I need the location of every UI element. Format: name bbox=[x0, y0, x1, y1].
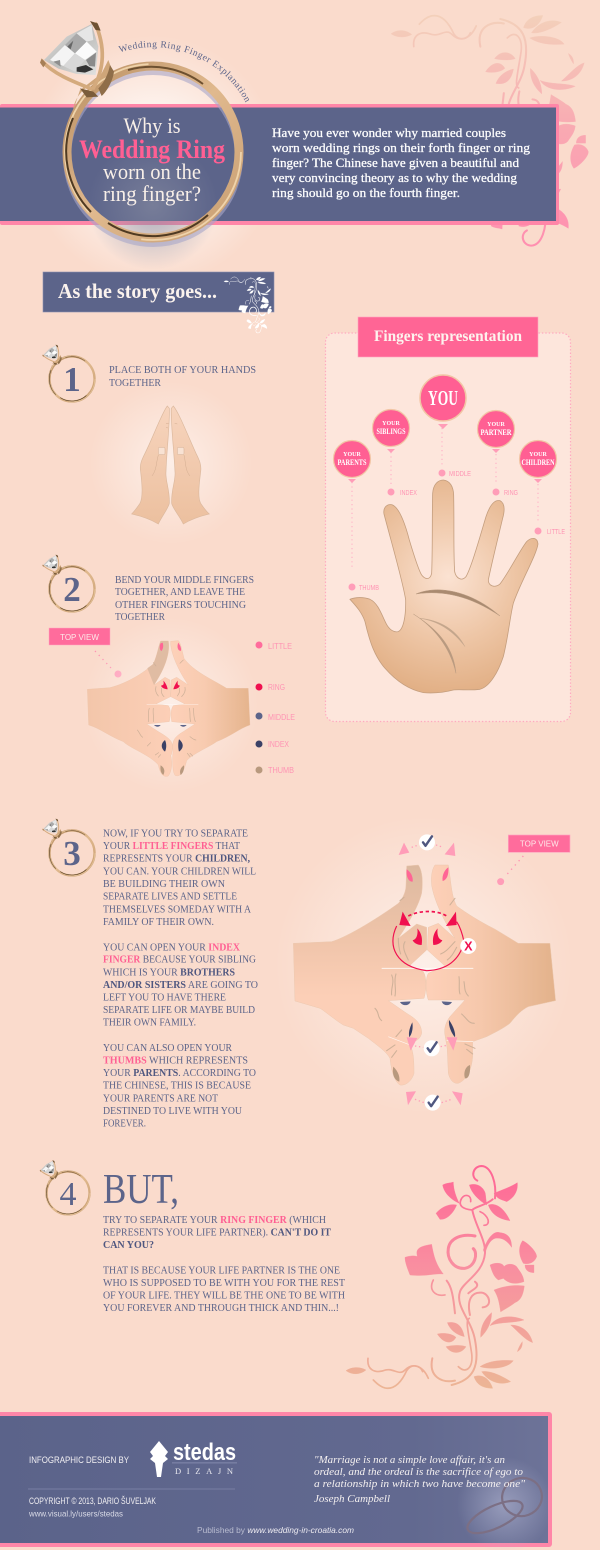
copyright bbox=[28, 1496, 156, 1518]
step 3 text: SEPARATE LIFE OR MAYBE BUILD bbox=[103, 1004, 255, 1016]
step 3 text: THEIR OWN FAMILY. bbox=[103, 1016, 196, 1028]
finger labels: MIDDLE bbox=[449, 469, 471, 478]
bubble: your children: YOUR bbox=[529, 452, 547, 458]
knuckle creases bbox=[375, 897, 475, 1057]
bubble: you bbox=[420, 375, 466, 429]
bubble: your children: CHILDREN bbox=[522, 458, 555, 467]
step 3 text: YOU CAN ALSO OPEN YOUR bbox=[103, 1042, 233, 1054]
step 4 text: THAT IS BECAUSE YOUR LIFE PARTNER IS THE ONE bbox=[103, 1264, 340, 1276]
step 4 text: YOU FOREVER AND THROUGH THICK AND THIN...! bbox=[103, 1302, 339, 1314]
legend: finger colours bbox=[256, 641, 295, 775]
logo: stedas dizajn: stedas bbox=[173, 1439, 236, 1466]
finger labels bbox=[348, 469, 565, 592]
glow behind praying hands bbox=[89, 381, 253, 545]
step 3 badge bbox=[42, 819, 95, 876]
left hand bbox=[293, 865, 427, 1085]
curved subtitle: Wedding Ring Finger Explanation bbox=[118, 41, 249, 102]
callout: top view, step 3 bbox=[497, 835, 570, 885]
step 3 text: LEFT YOU TO HAVE THERE bbox=[103, 992, 226, 1004]
step 3 text: SEPARATE LIVES AND SETTLE bbox=[103, 890, 237, 902]
step 3 text: THE CHINESE, THIS IS BECAUSE bbox=[103, 1080, 251, 1092]
callout: top view, step 3: TOP VIEW bbox=[520, 840, 559, 849]
header floral ornament bbox=[391, 16, 588, 246]
credit: INFOGRAPHIC DESIGN BY bbox=[29, 1455, 130, 1466]
step 3 text: WHICH IS YOUR BROTHERS bbox=[103, 966, 235, 978]
step 4 text: TRY TO SEPARATE YOUR RING FINGER (WHICH bbox=[103, 1214, 326, 1226]
bubble: your parents bbox=[334, 440, 370, 483]
footer divider bbox=[28, 1488, 235, 1490]
bubble: your partner: PARTNER bbox=[480, 428, 512, 437]
bubble: your siblings bbox=[372, 410, 410, 453]
step 4 text bbox=[103, 1214, 345, 1314]
ring fingers cannot open: X bbox=[464, 939, 473, 953]
legend: finger colours: INDEX bbox=[268, 739, 289, 749]
bubble: you: YOU bbox=[428, 386, 458, 410]
bubble: your siblings: YOUR bbox=[382, 421, 400, 427]
step 1 text: PLACE BOTH OF YOUR HANDS bbox=[109, 364, 256, 376]
footer panel bbox=[0, 1412, 553, 1550]
finger labels: LITTLE bbox=[547, 527, 565, 536]
logo: stedas dizajn: DIZAJN bbox=[175, 1466, 233, 1476]
step 3 text: THUMBS WHICH REPRESENTS bbox=[103, 1054, 248, 1066]
callout: top view, step 2: TOP VIEW bbox=[60, 633, 99, 642]
heading: but: BUT, bbox=[103, 1167, 179, 1213]
little fingers can open bbox=[399, 834, 455, 856]
icon: wedding rings bbox=[463, 1472, 547, 1540]
step 2 badge: 2 bbox=[63, 570, 81, 609]
bubble: your children bbox=[520, 440, 556, 483]
bubble: your partner: YOUR bbox=[487, 422, 505, 428]
title: Why is bbox=[124, 113, 180, 138]
glow behind step 2 hands bbox=[83, 617, 259, 793]
intro paragraph: worn wedding rings on their forth finger or ring bbox=[272, 141, 531, 155]
hand illustration bbox=[350, 480, 538, 693]
dotted connector lines bbox=[352, 428, 538, 568]
finger labels: RING bbox=[504, 488, 518, 497]
step 3 text: YOUR PARENTS ARE NOT bbox=[103, 1092, 218, 1104]
bubble: your parents: YOUR bbox=[343, 452, 361, 458]
intro paragraph: very convincing theory as to why the wedding bbox=[272, 171, 518, 185]
bubble: your siblings: SIBLINGS bbox=[376, 427, 406, 436]
logo: stedas dizajn bbox=[150, 1439, 237, 1477]
step 4 text: OF YOUR LIFE. THEY WILL BE THE ONE TO BE WITH bbox=[103, 1290, 345, 1302]
step 2 text: TOGETHER, AND LEAVE THE bbox=[115, 586, 245, 598]
step 4 text: REPRESENTS YOUR LIFE PARTNER). CAN'T DO IT bbox=[103, 1226, 332, 1238]
quote: ordeal, and the ordeal is the sacrifice of ego to bbox=[314, 1466, 523, 1478]
title bbox=[79, 113, 225, 206]
wedding ring with diamond bbox=[40, 21, 241, 240]
step 3 text bbox=[103, 828, 258, 1130]
illustration: step 2 hands top view bbox=[87, 641, 250, 776]
step 3 text: YOU CAN OPEN YOUR INDEX bbox=[103, 942, 240, 954]
right hand bbox=[426, 865, 556, 1083]
step 1 badge bbox=[42, 345, 95, 402]
step 3 text: YOUR PARENTS. ACCORDING TO bbox=[103, 1067, 256, 1079]
step 4 text: CAN YOU? bbox=[103, 1239, 154, 1251]
step 3 text: AND/OR SISTERS ARE GOING TO bbox=[103, 979, 258, 991]
title: Wedding Ring bbox=[79, 135, 225, 164]
legend: finger colours: MIDDLE bbox=[268, 712, 295, 722]
ring fingers cannot open bbox=[393, 911, 476, 971]
illustration: step 3 hands and markers bbox=[293, 834, 570, 1111]
bubble: your parents: PARENTS bbox=[338, 458, 367, 467]
legend: finger colours: RING bbox=[268, 682, 285, 692]
callout: top view, step 2 bbox=[49, 628, 122, 678]
intro paragraph: finger? The Chinese have given a beautiful and bbox=[272, 156, 520, 170]
quote bbox=[314, 1454, 525, 1505]
step 4 floral ornament bbox=[346, 1166, 537, 1388]
step 4 badge bbox=[40, 1160, 90, 1215]
finger labels: INDEX bbox=[400, 488, 417, 497]
heading: as the story goes: As the story goes... bbox=[58, 279, 217, 303]
legend: finger colours: THUMB bbox=[268, 765, 294, 775]
heading: fingers representation: Fingers representation bbox=[374, 328, 522, 345]
step 1 text: TOGETHER bbox=[109, 377, 162, 389]
heading: fingers representation bbox=[358, 317, 538, 357]
ring shadow bbox=[67, 71, 239, 243]
step 3 text: DESTINED TO LIVE WITH YOU bbox=[103, 1105, 242, 1117]
step 3 text: REPRESENTS YOUR CHILDREN, bbox=[103, 852, 250, 864]
step 1 text bbox=[109, 364, 256, 389]
step 3 text: FOREVER. bbox=[103, 1118, 146, 1130]
intro paragraph: ring should go on the fourth finger. bbox=[272, 186, 460, 200]
step 3 text: YOU CAN. YOUR CHILDREN WILL bbox=[103, 866, 256, 878]
nails bbox=[393, 867, 470, 1082]
step 2 text: TOGETHER bbox=[115, 611, 166, 623]
copyright: COPYRIGHT © 2013, DARIO ŠUVELJAK bbox=[29, 1496, 156, 1506]
step 4 badge: 4 bbox=[60, 1176, 76, 1213]
thumbs can open bbox=[406, 1091, 463, 1111]
step 3 text: BE BUILDING THEIR OWN bbox=[103, 878, 225, 890]
title: worn on the bbox=[103, 159, 201, 184]
step 2 text: BEND YOUR MIDDLE FINGERS bbox=[115, 574, 254, 586]
bubble: your partner bbox=[478, 410, 514, 453]
copyright: www.visual.ly/users/stedas bbox=[28, 1508, 123, 1518]
step 3 text: NOW, IF YOU TRY TO SEPARATE bbox=[103, 828, 248, 840]
intro paragraph: Have you ever wonder why married couples bbox=[272, 126, 506, 140]
heading: as the story goes bbox=[43, 272, 274, 333]
step 1 badge: 1 bbox=[63, 360, 81, 399]
finger labels: THUMB bbox=[359, 583, 379, 592]
published by: Published by www.wedding-in-croatia.com bbox=[197, 1525, 354, 1535]
step 4 text: WHO IS SUPPOSED TO BE WITH YOU FOR THE REST bbox=[103, 1277, 345, 1289]
quote: "Marriage is not a simple love affair, it's an bbox=[314, 1454, 505, 1466]
step 3 text: FAMILY OF THEIR OWN. bbox=[103, 916, 214, 928]
intro paragraph bbox=[272, 126, 531, 200]
step 3 text: THEMSELVES SOMEDAY WITH A bbox=[103, 904, 251, 916]
glow behind ring bbox=[28, 35, 278, 285]
illustration: praying hands bbox=[132, 406, 209, 524]
panel: fingers representation bbox=[326, 317, 570, 722]
step 2 text bbox=[115, 574, 254, 623]
step 2 badge bbox=[42, 555, 95, 612]
quote: Joseph Campbell bbox=[314, 1493, 390, 1505]
quote: a relationship in which two have become one" bbox=[314, 1478, 525, 1490]
legend: finger colours: LITTLE bbox=[268, 641, 292, 651]
header band bbox=[0, 104, 559, 270]
step 2 text: OTHER FINGERS TOUCHING bbox=[115, 599, 246, 611]
index fingers can open bbox=[407, 1037, 457, 1056]
step 3 badge: 3 bbox=[63, 834, 81, 873]
step 3 text: YOUR LITTLE FINGERS THAT bbox=[103, 840, 240, 852]
title: ring finger? bbox=[103, 181, 201, 206]
step 3 text: FINGER BECAUSE YOUR SIBLING bbox=[103, 954, 256, 966]
glow behind step 3 hands bbox=[274, 815, 574, 1115]
